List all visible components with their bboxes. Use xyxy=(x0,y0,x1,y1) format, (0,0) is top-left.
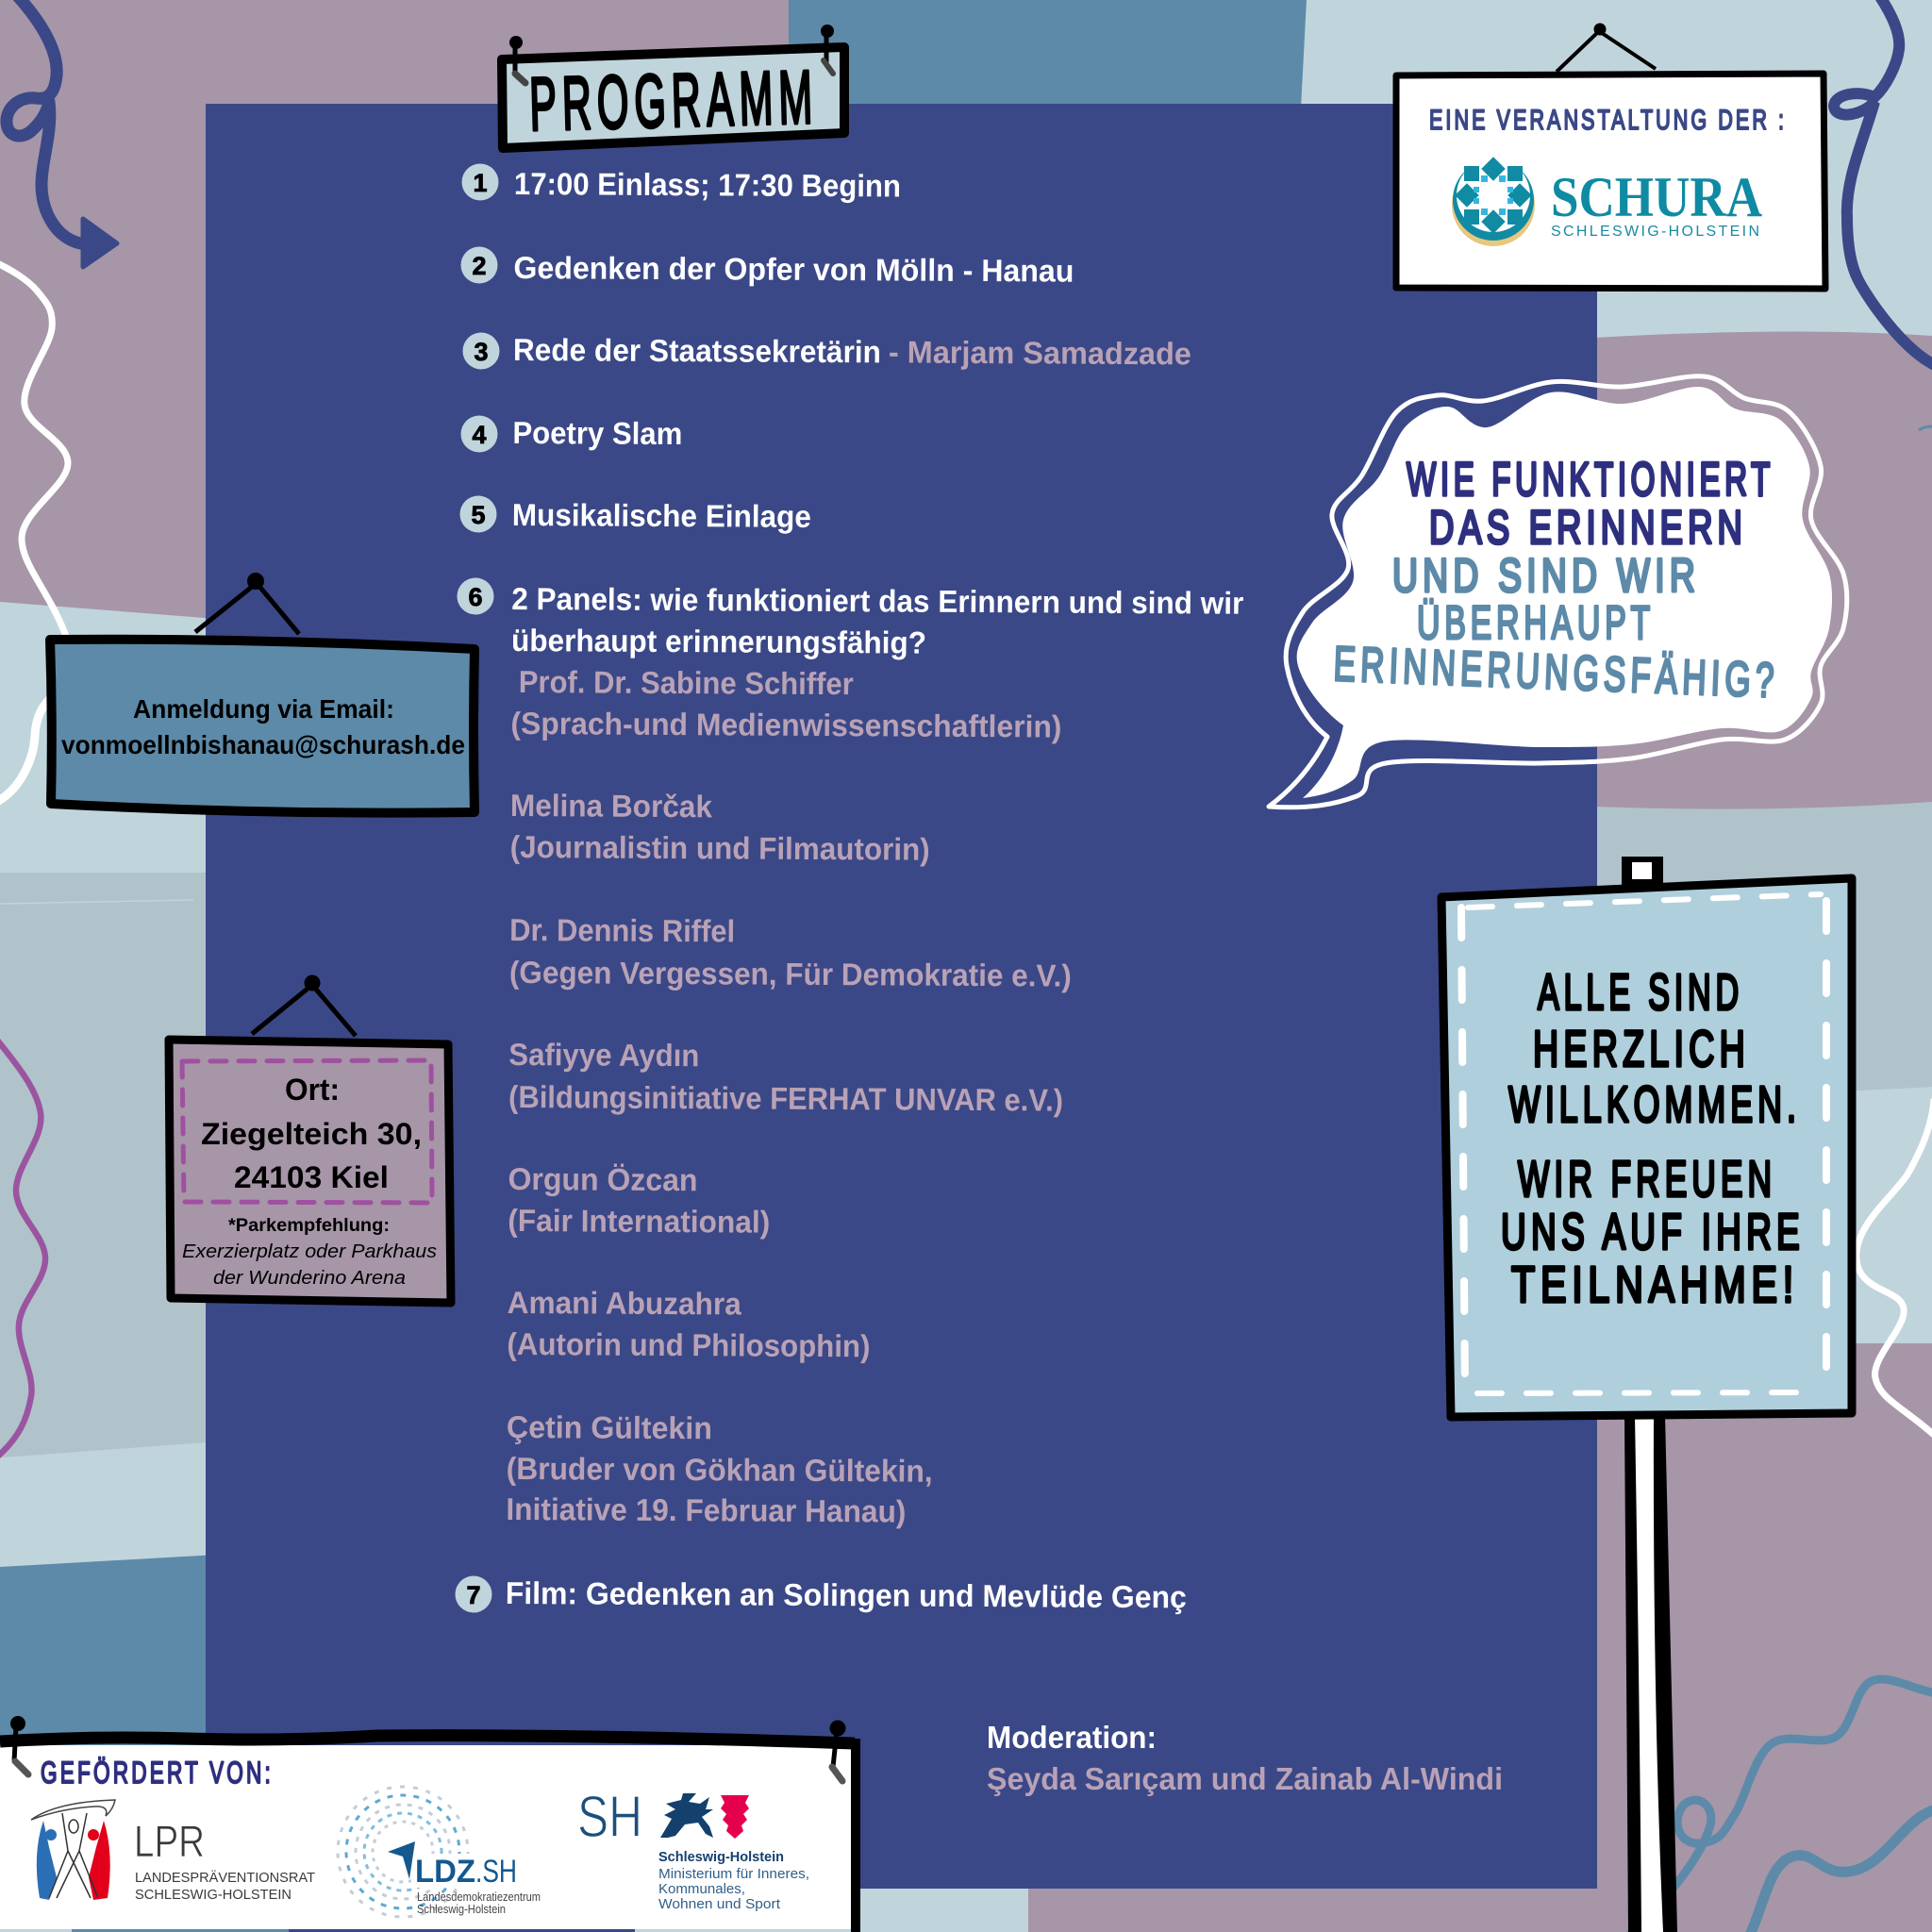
heading: PROGRAMM xyxy=(528,55,819,146)
logo: LPR: SCHLESWIG-HOLSTEIN xyxy=(135,1888,291,1903)
programme text: Melina Borčak xyxy=(510,788,713,824)
number badges: 1 xyxy=(473,169,488,197)
location text: Exerzierplatz oder Parkhaus xyxy=(182,1241,437,1262)
programme text xyxy=(506,166,1246,1615)
programme text: - Marjam Samadzade xyxy=(889,334,1191,371)
funding banner xyxy=(0,1716,860,1932)
programme text: (Gegen Vergessen, Für Demokratie e.V.) xyxy=(509,955,1072,993)
organiser caption: EINE VERANSTALTUNG DER : xyxy=(1429,105,1787,136)
welcome text: HERZLICH xyxy=(1533,1021,1750,1077)
programme text: Gedenken der Opfer von Mölln - Hanau xyxy=(513,250,1074,289)
programme text: (Bildungsinitiative FERHAT UNVAR e.V.) xyxy=(508,1079,1063,1118)
location text: der Wunderino Arena xyxy=(213,1268,406,1289)
programme text: Çetin Gültekin xyxy=(507,1409,712,1445)
programme text: (Journalistin und Filmautorin) xyxy=(510,829,930,867)
location text: Ziegelteich 30, xyxy=(201,1117,422,1151)
moderation: Moderation: xyxy=(987,1720,1157,1755)
location text: 24103 Kiel xyxy=(234,1160,389,1194)
white squiggle right xyxy=(1857,1099,1932,1435)
logo: LPR xyxy=(31,1800,315,1903)
programme text: (Sprach-und Medienwissenschaftlerin) xyxy=(510,706,1062,744)
programme text: Amani Abuzahra xyxy=(508,1285,741,1321)
registration text: Anmeldung via Email: xyxy=(133,694,394,724)
programme text: 17:00 Einlass; 17:30 Beginn xyxy=(514,166,901,204)
sign: location xyxy=(169,975,451,1303)
programme text: Poetry Slam xyxy=(512,415,682,451)
programme text: Safiyye Aydın xyxy=(508,1037,699,1073)
moderation xyxy=(987,1720,1503,1796)
logo: LPR: LANDESPRÄVENTIONSRAT xyxy=(135,1870,315,1886)
programme text: Prof. Dr. Sabine Schiffer xyxy=(519,664,854,701)
number badges: 4 xyxy=(472,421,487,449)
number badges: 2 xyxy=(472,252,487,280)
logo: Schleswig-Holstein ministry: Schleswig-Holstein xyxy=(658,1849,784,1865)
banner pins xyxy=(10,1716,845,1781)
sign: registration xyxy=(50,573,475,813)
welcome text: WIR FREUEN xyxy=(1518,1151,1776,1208)
logo: LDZ.SH xyxy=(338,1787,541,1917)
programme text: (Bruder von Gökhan Gültekin, xyxy=(507,1451,933,1489)
location text xyxy=(182,1073,437,1289)
programme text: (Autorin und Philosophin) xyxy=(507,1326,871,1363)
programme text: 2 Panels: wie funktioniert das Erinnern und sind wir xyxy=(511,581,1244,621)
programme text: Initiative 19. Februar Hanau) xyxy=(506,1491,907,1529)
logo: LDZ.SH: LDZ xyxy=(415,1854,475,1890)
number badges: 7 xyxy=(466,1581,481,1609)
ribbon arrow top left xyxy=(7,0,117,267)
location text: Ort: xyxy=(285,1073,340,1107)
pins xyxy=(509,25,834,83)
logo: Schleswig-Holstein ministry: SH xyxy=(577,1785,642,1850)
strip below banner xyxy=(0,1929,860,1932)
logo: LDZ.SH: .SH xyxy=(475,1854,517,1890)
registration text: vonmoellnbishanau@schurash.de xyxy=(61,730,465,759)
location text: *Parkempfehlung: xyxy=(228,1216,390,1236)
purple squiggle left xyxy=(0,1038,45,1458)
welcome text: UNS AUF IHRE xyxy=(1501,1204,1805,1260)
logo: Schleswig-Holstein ministry: Wohnen und Sport xyxy=(658,1896,781,1912)
banner heading: GEFÖRDERT VON: xyxy=(41,1756,274,1790)
welcome text xyxy=(1501,964,1805,1313)
programme text: Dr. Dennis Riffel xyxy=(509,912,735,948)
logo: Schleswig-Holstein ministry: Kommunales, xyxy=(658,1881,745,1897)
programme text: überhaupt erinnerungsfähig? xyxy=(511,623,926,660)
logo: LDZ.SH: Landesdemokratiezentrum xyxy=(417,1890,541,1904)
speech bubble xyxy=(1269,376,1847,808)
welcome text: ALLE SIND xyxy=(1538,964,1743,1021)
sign: welcome on post xyxy=(1441,857,1852,1932)
sign: organiser: SCHLESWIG-HOLSTEIN xyxy=(1551,224,1759,240)
bubble question: ÜBERHAUPT xyxy=(1417,596,1655,649)
sign: Programm xyxy=(502,25,844,148)
purple stitching xyxy=(182,1060,432,1203)
number badges: 3 xyxy=(474,338,489,366)
bubble question: DAS ERINNERN xyxy=(1429,501,1747,554)
programme text: (Fair International) xyxy=(508,1203,770,1240)
main navy panel xyxy=(206,104,1597,1889)
programme text: Rede der Staatssekretärin xyxy=(513,332,881,369)
welcome text: TEILNAHME! xyxy=(1511,1257,1799,1313)
moderation: Şeyda Sarıçam und Zainab Al-Windi xyxy=(987,1761,1503,1796)
Schura wordmark: SCHURA xyxy=(1551,166,1762,228)
number badges: 6 xyxy=(468,583,483,611)
bubble question: UND SIND WIR xyxy=(1392,549,1700,602)
number badges xyxy=(455,164,500,1613)
logo: Schleswig-Holstein ministry xyxy=(577,1785,809,1912)
post xyxy=(1622,857,1677,1932)
programme text: Musikalische Einlage xyxy=(512,497,811,534)
number badges: 5 xyxy=(471,501,486,529)
stitching xyxy=(1461,894,1826,1396)
white squiggle left xyxy=(0,262,68,803)
logo: LPR: LPR xyxy=(134,1816,205,1866)
sign: organiser xyxy=(1396,23,1825,289)
logo: LDZ.SH: Schleswig-Holstein xyxy=(417,1902,506,1916)
programme text: Film: Gedenken an Solingen und Mevlüde Genç xyxy=(506,1575,1187,1614)
programme text: Orgun Özcan xyxy=(508,1161,698,1197)
Schura logo mark xyxy=(1452,157,1535,246)
registration text xyxy=(61,694,465,759)
ribbon top right xyxy=(1834,0,1932,366)
logo: Schleswig-Holstein ministry: Ministerium für Inneres, xyxy=(658,1866,809,1882)
bubble question xyxy=(1333,453,1779,708)
teal squiggles bottom right xyxy=(1627,1679,1932,1932)
